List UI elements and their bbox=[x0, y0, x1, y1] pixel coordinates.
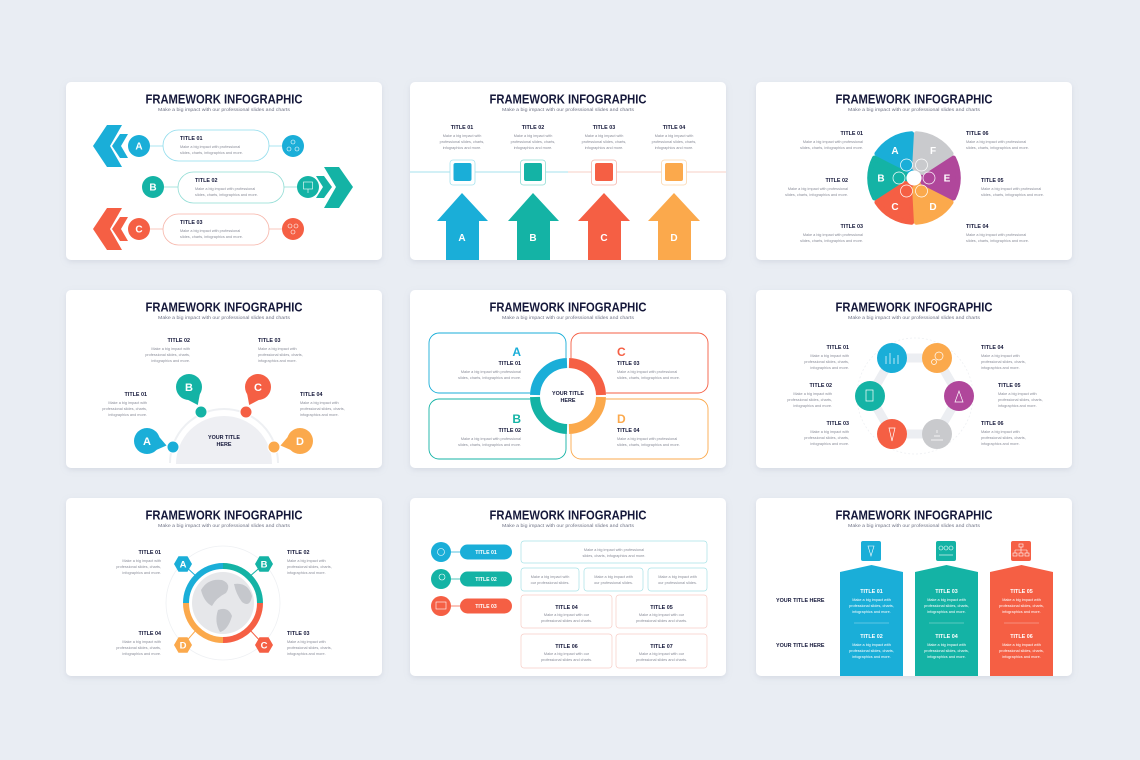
column 3: infographics and more. bbox=[1002, 655, 1041, 659]
column 1: infographics and more. bbox=[852, 610, 891, 614]
flower chart bbox=[870, 130, 958, 226]
column 3: professional slides, charts, bbox=[999, 604, 1044, 608]
text blocks: TITLE 05 bbox=[998, 383, 1020, 389]
text right: TITLE 04 bbox=[966, 224, 988, 230]
column 3: TITLE 05 bbox=[1010, 589, 1033, 595]
box D: slides, charts, infographics and more. bbox=[617, 443, 680, 447]
text blocks: TITLE 06 bbox=[981, 421, 1003, 427]
text blocks: professional slides, charts, bbox=[804, 360, 849, 364]
column D: Make a big impact with bbox=[655, 134, 693, 138]
column A: infographics and more. bbox=[443, 146, 481, 150]
center ring: YOUR TITLE bbox=[552, 391, 584, 397]
panel: slide 1 chevron rows bbox=[66, 82, 382, 260]
content boxes: professional slides and charts. bbox=[541, 619, 592, 623]
column 1: TITLE 01 bbox=[860, 589, 883, 595]
text blocks: professional slides, charts, bbox=[287, 646, 332, 650]
row labels: YOUR TITLE HERE bbox=[776, 598, 825, 604]
box B: Make a big impact with professional bbox=[461, 437, 521, 441]
text blocks bbox=[116, 550, 332, 656]
text left: Make a big impact with professional bbox=[803, 140, 863, 144]
box C: Make a big impact with professional bbox=[617, 370, 677, 374]
text blocks: professional slides, charts, bbox=[258, 353, 303, 357]
text blocks: Make a big impact with bbox=[122, 640, 161, 644]
text blocks: professional slides, charts, bbox=[981, 436, 1026, 440]
column B: B bbox=[529, 233, 537, 244]
text blocks: professional slides, charts, bbox=[981, 360, 1026, 364]
text blocks: Make a big impact with bbox=[810, 430, 849, 434]
box C: slides, charts, infographics and more. bbox=[617, 376, 680, 380]
column 1: Make a big impact with bbox=[852, 643, 891, 647]
row C: Make a big impact with professional bbox=[180, 229, 240, 233]
flower chart: F bbox=[930, 146, 936, 157]
column 2: infographics and more. bbox=[927, 610, 966, 614]
text blocks: infographics and more. bbox=[258, 359, 297, 363]
row C: TITLE 03 bbox=[180, 220, 202, 226]
column C: professional slides, charts, bbox=[582, 140, 626, 144]
hexagon cycle bbox=[855, 338, 974, 454]
title: FRAMEWORK INFOGRAPHIC bbox=[836, 300, 993, 314]
panel: slide 5 quadrant boxes bbox=[410, 290, 726, 468]
title: FRAMEWORK INFOGRAPHIC bbox=[836, 508, 993, 522]
row B bbox=[142, 167, 353, 208]
row C bbox=[93, 208, 304, 250]
row A: TITLE 01 bbox=[180, 136, 202, 142]
column A bbox=[437, 125, 488, 260]
content boxes: Make a big impact with our bbox=[544, 613, 590, 617]
column 1 bbox=[840, 541, 903, 676]
text left: slides, charts, infographics and more. bbox=[800, 146, 863, 150]
pin A: A bbox=[143, 436, 151, 448]
row A bbox=[93, 125, 304, 167]
content boxes: Make a big impact with our bbox=[639, 613, 685, 617]
row A: Make a big impact with professional bbox=[180, 145, 240, 149]
column 2: TITLE 03 bbox=[935, 589, 958, 595]
text blocks: infographics and more. bbox=[793, 404, 832, 408]
content boxes: our professional slides. bbox=[658, 581, 697, 585]
row A: A bbox=[135, 142, 143, 152]
pin C bbox=[240, 374, 271, 418]
text blocks: professional slides, charts, bbox=[145, 353, 190, 357]
title pills bbox=[431, 542, 512, 616]
text blocks: Make a big impact with bbox=[287, 640, 326, 644]
text blocks: professional slides, charts, bbox=[300, 407, 345, 411]
text left: Make a big impact with professional bbox=[788, 187, 848, 191]
column D bbox=[648, 125, 700, 260]
text blocks: professional slides, charts, bbox=[804, 436, 849, 440]
box C: C bbox=[617, 345, 626, 359]
text blocks: professional slides, charts, bbox=[787, 398, 832, 402]
subtitle: Make a big impact with our professional slides and charts bbox=[848, 315, 981, 320]
content boxes: professional slides and charts. bbox=[541, 658, 592, 662]
text blocks: infographics and more. bbox=[810, 366, 849, 370]
badge A: A bbox=[180, 560, 187, 570]
semicircle center: HERE bbox=[217, 442, 232, 448]
text blocks: Make a big impact with bbox=[981, 354, 1020, 358]
panel: slide 9 columns bbox=[756, 498, 1072, 676]
column 1: Make a big impact with bbox=[852, 598, 891, 602]
column 3: TITLE 06 bbox=[1010, 634, 1033, 640]
text blocks: Make a big impact with bbox=[151, 347, 190, 351]
text blocks: professional slides, charts, bbox=[287, 565, 332, 569]
semicircle center: YOUR TITLE bbox=[208, 435, 240, 441]
column A: TITLE 01 bbox=[451, 125, 473, 131]
content boxes: professional slides and charts. bbox=[636, 619, 687, 623]
box B bbox=[429, 399, 566, 459]
row B: Make a big impact with professional bbox=[195, 187, 255, 191]
text blocks: infographics and more. bbox=[981, 366, 1020, 370]
box D bbox=[571, 399, 708, 459]
column B: Make a big impact with bbox=[514, 134, 552, 138]
column C: TITLE 03 bbox=[593, 125, 615, 131]
content boxes: Make a big impact with bbox=[594, 575, 633, 579]
box C: TITLE 03 bbox=[617, 361, 639, 367]
semicircle center bbox=[170, 409, 278, 464]
title pills: TITLE 01 bbox=[475, 550, 497, 556]
text blocks: infographics and more. bbox=[108, 413, 147, 417]
column C: C bbox=[600, 233, 608, 244]
text blocks: professional slides, charts, bbox=[116, 565, 161, 569]
title: FRAMEWORK INFOGRAPHIC bbox=[146, 508, 303, 522]
box B: TITLE 02 bbox=[499, 428, 521, 434]
text right: slides, charts, infographics and more. bbox=[966, 146, 1029, 150]
text blocks: infographics and more. bbox=[810, 442, 849, 446]
text blocks: TITLE 02 bbox=[287, 550, 309, 556]
column B: TITLE 02 bbox=[522, 125, 544, 131]
badge A bbox=[174, 556, 192, 572]
text blocks: Make a big impact with bbox=[300, 401, 339, 405]
badge B: B bbox=[261, 560, 268, 570]
column 2 bbox=[915, 541, 978, 676]
text blocks: Make a big impact with bbox=[258, 347, 297, 351]
text blocks bbox=[787, 345, 1043, 446]
text right: Make a big impact with professional bbox=[981, 187, 1041, 191]
content boxes: Make a big impact with bbox=[531, 575, 569, 579]
subtitle: Make a big impact with our professional slides and charts bbox=[848, 523, 981, 528]
row A: slides, charts, infographics and more. bbox=[180, 151, 243, 155]
text right: slides, charts, infographics and more. bbox=[981, 193, 1044, 197]
row C: slides, charts, infographics and more. bbox=[180, 235, 243, 239]
text blocks: infographics and more. bbox=[981, 442, 1020, 446]
column C: infographics and more. bbox=[585, 146, 623, 150]
pin D bbox=[268, 428, 313, 454]
column D: infographics and more. bbox=[655, 146, 693, 150]
text blocks: infographics and more. bbox=[287, 571, 326, 575]
column D: professional slides, charts, bbox=[652, 140, 696, 144]
panel: slide 8 grid boxes bbox=[410, 498, 726, 676]
pin B: B bbox=[185, 382, 193, 394]
text blocks: Make a big impact with bbox=[287, 559, 326, 563]
text blocks: infographics and more. bbox=[998, 404, 1037, 408]
content boxes bbox=[521, 541, 707, 668]
row B: TITLE 02 bbox=[195, 178, 217, 184]
content boxes: Make a big impact with bbox=[658, 575, 697, 579]
text blocks: TITLE 04 bbox=[981, 345, 1003, 351]
subtitle: Make a big impact with our professional slides and charts bbox=[502, 523, 635, 528]
subtitle: Make a big impact with our professional slides and charts bbox=[848, 107, 981, 112]
subtitle: Make a big impact with our professional slides and charts bbox=[158, 107, 291, 112]
column D: TITLE 04 bbox=[663, 125, 685, 131]
content boxes: slides, charts, infographics and more. bbox=[583, 554, 645, 558]
column 2: Make a big impact with bbox=[927, 598, 966, 602]
column 3: professional slides, charts, bbox=[999, 649, 1044, 653]
title pills: TITLE 02 bbox=[475, 577, 497, 583]
column 3: Make a big impact with bbox=[1002, 643, 1041, 647]
column B: infographics and more. bbox=[514, 146, 552, 150]
center ring bbox=[530, 358, 606, 434]
column A: professional slides, charts, bbox=[440, 140, 484, 144]
row labels: YOUR TITLE HERE bbox=[776, 643, 825, 649]
text blocks: professional slides, charts, bbox=[998, 398, 1043, 402]
panel: slide 2 arrows bbox=[410, 82, 726, 260]
timeline line bbox=[410, 171, 726, 173]
content boxes: Make a big impact with our bbox=[639, 652, 685, 656]
content boxes: our professional slides. bbox=[531, 581, 569, 585]
text right: Make a big impact with professional bbox=[966, 233, 1026, 237]
text left: TITLE 01 bbox=[841, 131, 863, 137]
badge C bbox=[255, 637, 273, 653]
column 3: Make a big impact with bbox=[1002, 598, 1041, 602]
column 2: Make a big impact with bbox=[927, 643, 966, 647]
text left: TITLE 03 bbox=[841, 224, 863, 230]
text blocks: Make a big impact with bbox=[108, 401, 147, 405]
title: FRAMEWORK INFOGRAPHIC bbox=[490, 300, 647, 314]
column C: Make a big impact with bbox=[585, 134, 623, 138]
box A: Make a big impact with professional bbox=[461, 370, 521, 374]
content boxes: Make a big impact with our bbox=[544, 652, 590, 656]
column 1: professional slides, charts, bbox=[849, 604, 894, 608]
content boxes: TITLE 07 bbox=[650, 644, 673, 650]
text blocks: professional slides, charts, bbox=[102, 407, 147, 411]
column C bbox=[578, 125, 630, 260]
panel: slide 7 globe bbox=[66, 498, 382, 676]
badge D: D bbox=[180, 640, 187, 652]
content boxes: our professional slides. bbox=[594, 581, 633, 585]
text right: TITLE 06 bbox=[966, 131, 988, 137]
column 3: infographics and more. bbox=[1002, 610, 1041, 614]
pin C: C bbox=[254, 382, 262, 394]
text left: slides, charts, infographics and more. bbox=[785, 193, 848, 197]
text blocks: TITLE 02 bbox=[810, 383, 832, 389]
pin D: D bbox=[296, 436, 304, 448]
text left bbox=[785, 131, 863, 243]
center ring: HERE bbox=[561, 398, 576, 404]
text blocks: Make a big impact with bbox=[810, 354, 849, 358]
column A: Make a big impact with bbox=[443, 134, 481, 138]
text right: Make a big impact with professional bbox=[966, 140, 1026, 144]
content boxes: TITLE 04 bbox=[555, 605, 578, 611]
title: FRAMEWORK INFOGRAPHIC bbox=[836, 92, 993, 106]
title: FRAMEWORK INFOGRAPHIC bbox=[146, 300, 303, 314]
panel: slide 3 petal flower bbox=[756, 82, 1072, 260]
text right: TITLE 05 bbox=[981, 178, 1003, 184]
text blocks: TITLE 01 bbox=[139, 550, 161, 556]
title: FRAMEWORK INFOGRAPHIC bbox=[146, 92, 303, 106]
column 2: TITLE 04 bbox=[935, 634, 958, 640]
box D: TITLE 04 bbox=[617, 428, 639, 434]
box C bbox=[571, 333, 708, 393]
flower chart: E bbox=[944, 174, 951, 184]
box B: B bbox=[512, 412, 521, 426]
box D: D bbox=[617, 412, 626, 426]
text left: slides, charts, infographics and more. bbox=[800, 239, 863, 243]
text blocks: TITLE 01 bbox=[827, 345, 849, 351]
panel: slide 4 semicircle pins bbox=[66, 290, 382, 468]
column 2: professional slides, charts, bbox=[924, 604, 969, 608]
flower chart: C bbox=[891, 202, 899, 213]
text left: TITLE 02 bbox=[826, 178, 848, 184]
title pills: TITLE 03 bbox=[475, 604, 497, 610]
text right: slides, charts, infographics and more. bbox=[966, 239, 1029, 243]
pin B bbox=[176, 374, 207, 418]
box D: Make a big impact with professional bbox=[617, 437, 677, 441]
badge B bbox=[255, 556, 273, 572]
text blocks: Make a big impact with bbox=[998, 392, 1037, 396]
column B bbox=[508, 125, 559, 260]
title: FRAMEWORK INFOGRAPHIC bbox=[490, 92, 647, 106]
box A: slides, charts, infographics and more. bbox=[458, 376, 521, 380]
row B: B bbox=[149, 182, 157, 194]
text blocks: TITLE 03 bbox=[258, 338, 280, 344]
flower chart: B bbox=[877, 174, 885, 184]
content boxes: TITLE 05 bbox=[650, 605, 673, 611]
text blocks: TITLE 02 bbox=[168, 338, 190, 344]
text blocks: Make a big impact with bbox=[122, 559, 161, 563]
text left: Make a big impact with professional bbox=[803, 233, 863, 237]
text blocks: professional slides, charts, bbox=[116, 646, 161, 650]
flower chart: D bbox=[929, 202, 937, 213]
text blocks: Make a big impact with bbox=[793, 392, 832, 396]
text blocks: TITLE 04 bbox=[300, 392, 322, 398]
subtitle: Make a big impact with our professional slides and charts bbox=[158, 315, 291, 320]
text blocks: TITLE 03 bbox=[287, 631, 309, 637]
text blocks: TITLE 01 bbox=[125, 392, 147, 398]
text right bbox=[966, 131, 1044, 243]
text blocks: infographics and more. bbox=[122, 571, 161, 575]
text blocks: TITLE 03 bbox=[827, 421, 849, 427]
column A: A bbox=[458, 233, 466, 244]
column 1: infographics and more. bbox=[852, 655, 891, 659]
column 1: TITLE 02 bbox=[860, 634, 883, 640]
content boxes: Make a big impact with professional bbox=[584, 548, 644, 552]
content boxes: TITLE 06 bbox=[555, 644, 578, 650]
box A: A bbox=[512, 345, 521, 359]
badge C: C bbox=[261, 640, 268, 652]
row labels bbox=[776, 598, 825, 649]
box A bbox=[429, 333, 566, 393]
panel: slide 6 hexagon circles bbox=[756, 290, 1072, 468]
flower chart: A bbox=[891, 146, 899, 157]
subtitle: Make a big impact with our professional slides and charts bbox=[158, 523, 291, 528]
column 3 bbox=[990, 541, 1053, 676]
text blocks: infographics and more. bbox=[287, 652, 326, 656]
box A: TITLE 01 bbox=[499, 361, 521, 367]
subtitle: Make a big impact with our professional slides and charts bbox=[502, 315, 635, 320]
text blocks: TITLE 04 bbox=[139, 631, 161, 637]
text blocks bbox=[102, 338, 345, 417]
row C: C bbox=[135, 224, 143, 236]
row B: slides, charts, infographics and more. bbox=[195, 193, 258, 197]
column 2: infographics and more. bbox=[927, 655, 966, 659]
column B: professional slides, charts, bbox=[511, 140, 555, 144]
text blocks: infographics and more. bbox=[122, 652, 161, 656]
column 2: professional slides, charts, bbox=[924, 649, 969, 653]
content boxes: professional slides and charts. bbox=[636, 658, 687, 662]
text blocks: Make a big impact with bbox=[981, 430, 1020, 434]
column 1: professional slides, charts, bbox=[849, 649, 894, 653]
globe ring bbox=[166, 546, 280, 660]
subtitle: Make a big impact with our professional slides and charts bbox=[502, 107, 635, 112]
text blocks: infographics and more. bbox=[151, 359, 190, 363]
text blocks: infographics and more. bbox=[300, 413, 339, 417]
pin A bbox=[134, 428, 179, 454]
box B: slides, charts, infographics and more. bbox=[458, 443, 521, 447]
title: FRAMEWORK INFOGRAPHIC bbox=[490, 508, 647, 522]
badge D bbox=[174, 637, 192, 653]
column D: D bbox=[670, 233, 678, 244]
